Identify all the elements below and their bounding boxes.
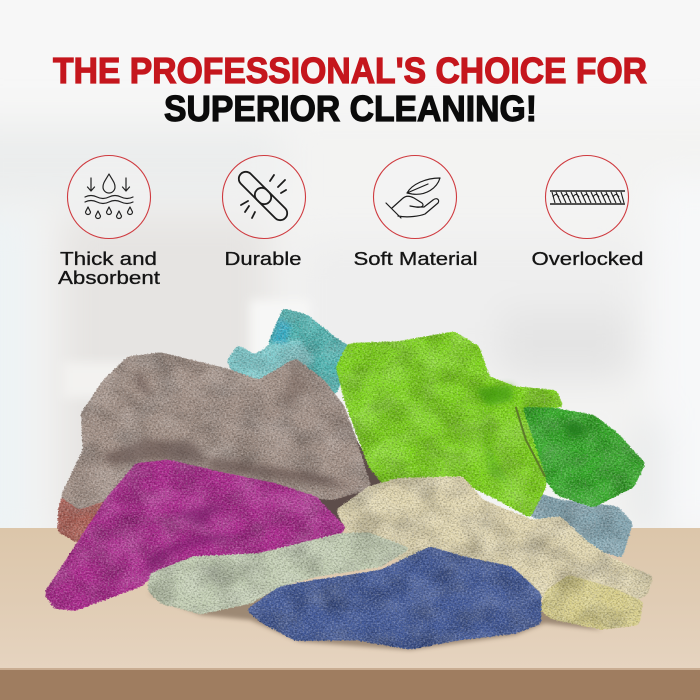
towel: cream [336,477,653,607]
taupe fold shadows [101,363,357,488]
label: Overlocked [532,249,644,269]
label line 2: Absorbent [58,268,160,288]
towel pile [44,308,653,650]
towel: grey blue [516,487,633,557]
magenta fold shadows [144,503,259,577]
icon: overlock stitch [546,156,628,238]
lime seam [516,407,545,477]
feature: soft material [354,156,478,269]
label: Durable [224,249,302,269]
towel: dark green [516,400,645,507]
title line 2: SUPERIOR CLEANING! [164,88,537,129]
wooden table [0,528,700,700]
towel: navy [246,547,541,649]
shadow under pile [148,590,601,650]
label: Thick and [60,249,157,269]
towel: magenta [44,460,345,611]
title line 1: THE PROFESSIONAL'S CHOICE FOR [53,50,647,91]
towel: red-brown [58,465,116,543]
dark gap underlay [152,440,385,567]
feature: overlocked [532,156,644,269]
dark green hollow [563,420,589,438]
blurred room background [0,0,700,545]
towel: sage [148,533,410,614]
icon: water absorbing [68,156,150,238]
towel: yellow flap [540,575,643,629]
feature: thick and absorbent [58,156,160,288]
icon: hand and leaf [374,156,456,238]
title [53,50,647,129]
towel: taupe [61,353,371,509]
towel: teal [227,308,352,395]
icon: broken chain link [222,156,306,238]
feature: durable [222,156,306,269]
lime fold shadows [475,385,514,487]
label: Soft Material [354,249,478,269]
towel: lime green [336,332,563,517]
